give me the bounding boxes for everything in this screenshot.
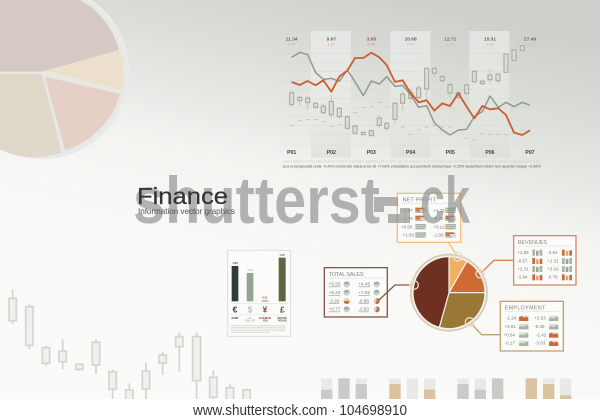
- currency labels: [232, 317, 287, 323]
- bar values: 0.83: [247, 268, 253, 272]
- panel heading: TOTAL SALES: [329, 272, 364, 278]
- total sales panel: [324, 268, 387, 317]
- secondary values: [288, 42, 536, 47]
- secondary values: 1.37: [327, 42, 336, 47]
- values: -1.24: [506, 316, 517, 321]
- values: +1.93: [403, 233, 415, 238]
- top values: 3.05: [367, 37, 376, 43]
- values: +0.56: [401, 224, 413, 229]
- period labels: P02: [327, 150, 336, 156]
- mini bars: [532, 250, 572, 280]
- net profit panel: [397, 193, 461, 242]
- values: -3.26: [329, 298, 340, 303]
- card caption lines: [231, 326, 286, 332]
- values: [517, 250, 559, 280]
- bar values: [232, 253, 285, 300]
- values: [329, 282, 371, 312]
- dash markers: [290, 103, 524, 140]
- orange line series: [292, 53, 530, 135]
- values: +2.63: [534, 316, 546, 321]
- pie ring: [411, 255, 487, 331]
- stock watermark: shutterst: [133, 163, 380, 237]
- values: -1.87: [403, 208, 413, 213]
- values: +5.55: [329, 282, 341, 287]
- currency labels: BRITISH: [278, 318, 287, 320]
- shaded period bands: [311, 31, 509, 158]
- period labels: P07: [525, 150, 535, 156]
- secondary values: 7.63: [407, 42, 415, 47]
- faded candlesticks bottom left: [9, 289, 250, 401]
- currency labels: JAPANESE: [259, 317, 272, 320]
- candlesticks: [290, 45, 524, 136]
- values: -0.38: [433, 216, 444, 221]
- currency labels: POUND: [278, 321, 287, 323]
- pie callout rings: [410, 252, 485, 326]
- currency symbols: €: [233, 304, 238, 314]
- currency labels: DOLLAR: [245, 320, 255, 323]
- bar chart card: [228, 250, 291, 336]
- bar values: 0.01: [262, 296, 268, 300]
- top values: 9.97: [327, 37, 336, 43]
- bars: [232, 258, 286, 301]
- top values: 11.34: [286, 37, 298, 43]
- period labels: [287, 150, 535, 156]
- values: -0.98: [358, 298, 369, 303]
- currency symbols: [233, 304, 285, 314]
- currency labels: U.S.: [248, 318, 253, 320]
- footer bar: [0, 399, 600, 419]
- connectors: [379, 242, 514, 335]
- top values: 27.49: [524, 37, 536, 43]
- title: Finance: [137, 183, 228, 209]
- secondary values: 11.18: [525, 42, 536, 47]
- currency symbols: £: [280, 304, 285, 314]
- values: -1.42: [536, 332, 547, 337]
- footnotes: [283, 160, 541, 168]
- gray line series: [292, 52, 530, 135]
- mini area charts: [519, 316, 558, 346]
- period labels: P06: [485, 150, 495, 156]
- currency labels: EURO: [232, 318, 239, 320]
- values: -0.39: [534, 324, 545, 329]
- values: -0.57: [517, 258, 528, 263]
- bar values: 1.30: [279, 253, 285, 257]
- employment panel: [500, 301, 563, 351]
- top values: 10.68: [405, 37, 417, 43]
- pie slices: [413, 257, 485, 329]
- secondary values: 6.92: [367, 42, 376, 47]
- currency symbols: $: [248, 304, 253, 314]
- values: [401, 208, 445, 238]
- values: -2.76: [403, 216, 413, 221]
- secondary values: 1.74: [288, 42, 296, 47]
- period labels: P05: [446, 150, 455, 156]
- period labels: P03: [367, 150, 376, 156]
- panel heading: REVENUES: [518, 240, 547, 246]
- values: +2.31: [517, 266, 529, 271]
- stock watermark: ck: [420, 163, 470, 237]
- currency symbols: ¥: [263, 304, 268, 314]
- values: +3.16: [547, 266, 559, 271]
- bar values: 1.00: [232, 261, 238, 265]
- values: +7.82: [358, 290, 371, 295]
- secondary values: 2.60: [486, 42, 495, 47]
- values: [504, 316, 547, 346]
- values: +0.64: [504, 332, 516, 337]
- faded stacked bars bottom right: [321, 378, 571, 399]
- dot indicators: [344, 281, 380, 312]
- values: -1.06: [433, 233, 444, 238]
- revenues panel: [514, 236, 576, 285]
- values: +6.24: [329, 290, 341, 295]
- values: -0.78: [547, 275, 558, 280]
- values: -3.63: [535, 341, 546, 346]
- large faded pie chart: [0, 0, 128, 158]
- subtitle: Information vector graphics: [138, 207, 235, 216]
- values: +1.09: [517, 250, 529, 255]
- panel heading: NET PROFIT: [403, 197, 437, 203]
- values: +2.81: [504, 324, 516, 329]
- candlestick and line chart: [283, 31, 541, 168]
- top values: 15.31: [484, 37, 496, 43]
- period labels: P04: [406, 150, 415, 156]
- mini bars: [415, 208, 456, 238]
- values: +4.45: [358, 282, 371, 287]
- secondary values: 2.03: [446, 42, 455, 47]
- values: -0.17: [505, 341, 515, 346]
- values: +1.31: [547, 258, 559, 263]
- pie chart and panels: [379, 193, 576, 351]
- top values: 12.71: [444, 37, 457, 43]
- period labels: P01: [287, 150, 296, 156]
- values: +1.32: [433, 208, 445, 213]
- top values: [286, 37, 536, 43]
- footer text: www.shutterstock.com · 104698910: [192, 403, 407, 419]
- footnotes: Lorem ipsum +0.37% dolor sit amet -0.61% consectetur adipiscing elit +1.37% sed do eiusmod +2.02% tempor incidunt -0.04% ut labore et -0.13% dolore magna aliqua +0.32%: [283, 160, 541, 164]
- footnotes: sed ut perspiciatis unde -4.20% omnis iste natus error sit +7.03% voluptatem accusantium doloremque -0.25% laudantium totam rem aperiam eaque +2.96%: [283, 164, 541, 168]
- values: -3.50: [358, 307, 369, 312]
- title block: [137, 183, 235, 216]
- values: +0.12: [433, 224, 445, 229]
- panel heading: EMPLOYMENT: [505, 305, 546, 311]
- currency labels: YEN: [263, 321, 268, 323]
- values: +0.77: [329, 307, 341, 312]
- values: -3.64: [547, 250, 558, 255]
- values: -1.84: [517, 275, 528, 280]
